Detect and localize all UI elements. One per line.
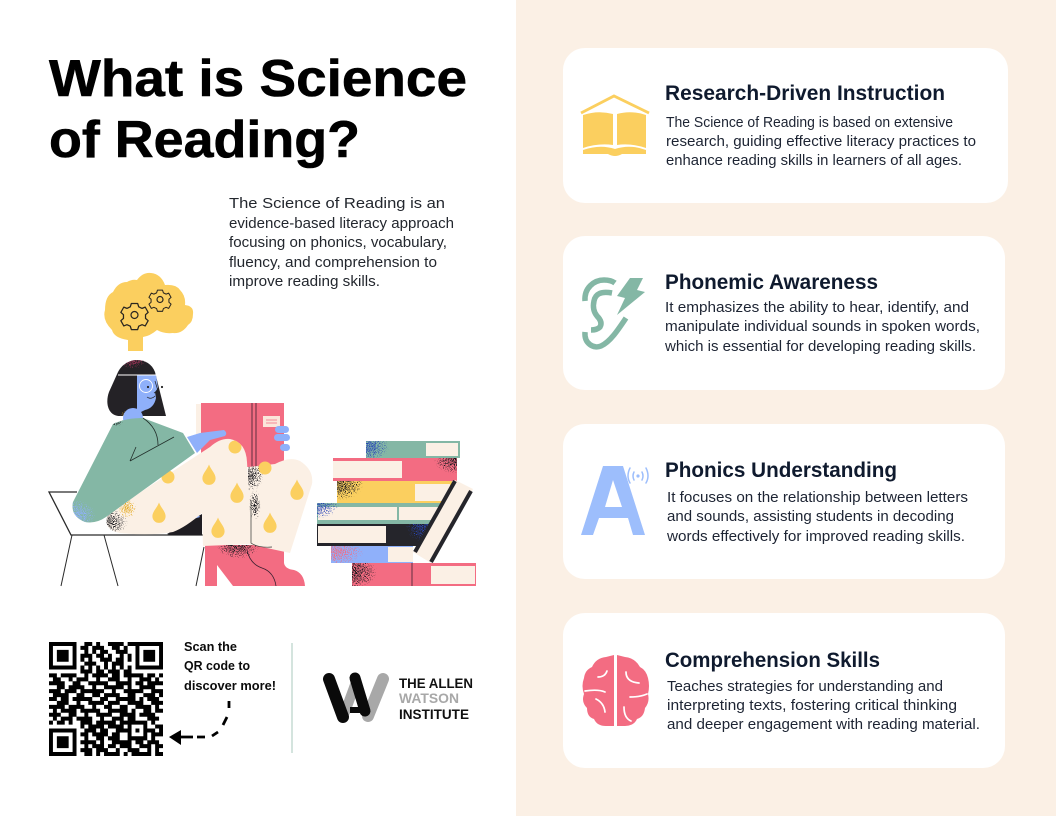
heading: Phonemic Awareness (665, 271, 878, 294)
heading: Comprehension Skills (665, 649, 880, 672)
panel: Comprehension Skills (563, 613, 1005, 768)
title (49, 50, 467, 169)
boot (205, 545, 305, 586)
body text (664, 300, 980, 355)
illustration: woman reading with thought bubble (49, 273, 312, 586)
body text: and deeper engagement with reading material. (667, 717, 980, 733)
logo: The Allen Watson Institute (329, 675, 473, 722)
logo mark (329, 678, 383, 717)
intro paragraph (229, 196, 454, 290)
heading: Research-Driven Instruction (665, 82, 945, 105)
hand and fingers (187, 426, 290, 453)
green sweater (72, 418, 195, 522)
title: What is Science (49, 50, 467, 108)
intro paragraph: improve reading skills. (229, 274, 380, 290)
book 4 green and cream (317, 503, 440, 524)
leaning book (413, 480, 473, 563)
trouser legs (106, 438, 312, 553)
body text: enhance reading skills in learners of all ages. (666, 153, 962, 169)
heading: Phonics Understanding (665, 459, 897, 482)
body text: research, guiding effective literacy practices to (666, 134, 976, 150)
arrow to QR code (169, 701, 229, 745)
logo text: WATSON (399, 690, 459, 706)
body text: interpreting texts, fostering critical thinking (667, 698, 957, 714)
panel: Research-Driven Instruction (563, 48, 1008, 203)
book 1 green (366, 441, 460, 458)
open book held upright (196, 403, 284, 480)
title: of Reading? (49, 111, 360, 169)
intro paragraph: The Science of Reading is an (229, 196, 445, 212)
logo text: INSTITUTE (399, 706, 469, 722)
body text: and sounds, assisting students in decoding (667, 509, 954, 525)
logo text (399, 675, 473, 722)
QR code (49, 644, 163, 754)
book 7 pink (352, 563, 476, 586)
scan caption: Scan the (184, 640, 237, 654)
icon: open book (581, 96, 649, 156)
icon: brain (582, 655, 649, 726)
body text: Teaches strategies for understanding and (667, 679, 943, 695)
book 3 yellow (337, 481, 452, 503)
body text: It focuses on the relationship between letters (667, 490, 968, 506)
panel: Phonics Understanding (563, 424, 1005, 579)
body text: words effectively for improved reading skills. (666, 529, 965, 545)
yellow drops pattern (152, 440, 304, 538)
body text: The Science of Reading is based on extensive (666, 115, 953, 131)
illustration: stack of books (317, 441, 476, 586)
scan caption (184, 640, 276, 693)
scan caption: QR code to (184, 659, 250, 673)
scan caption: discover more! (184, 679, 276, 693)
body text: It emphasizes the ability to hear, identify, and (665, 300, 969, 316)
logo text: THE ALLEN (399, 675, 473, 691)
icon: thought bubble with gears (104, 273, 193, 351)
body text: which is essential for developing reading skills. (664, 339, 976, 355)
right background panel (516, 0, 1056, 816)
intro paragraph: focusing on phonics, vocabulary, (229, 235, 447, 251)
chair (49, 492, 204, 586)
hair and face (107, 360, 166, 420)
body text: manipulate individual sounds in spoken words, (665, 319, 980, 335)
body text (666, 490, 968, 545)
body text (666, 115, 976, 169)
book 6 blue (331, 546, 413, 563)
intro paragraph: evidence-based literacy approach (229, 216, 454, 232)
panel: Phonemic Awareness (563, 236, 1005, 390)
book 2 pink (333, 458, 457, 481)
icon: ear with bolt (585, 278, 645, 347)
body text (667, 679, 980, 733)
intro paragraph: fluency, and comprehension to (229, 255, 437, 271)
icon: letter A with sound waves (581, 466, 648, 535)
book 5 black (317, 524, 428, 546)
